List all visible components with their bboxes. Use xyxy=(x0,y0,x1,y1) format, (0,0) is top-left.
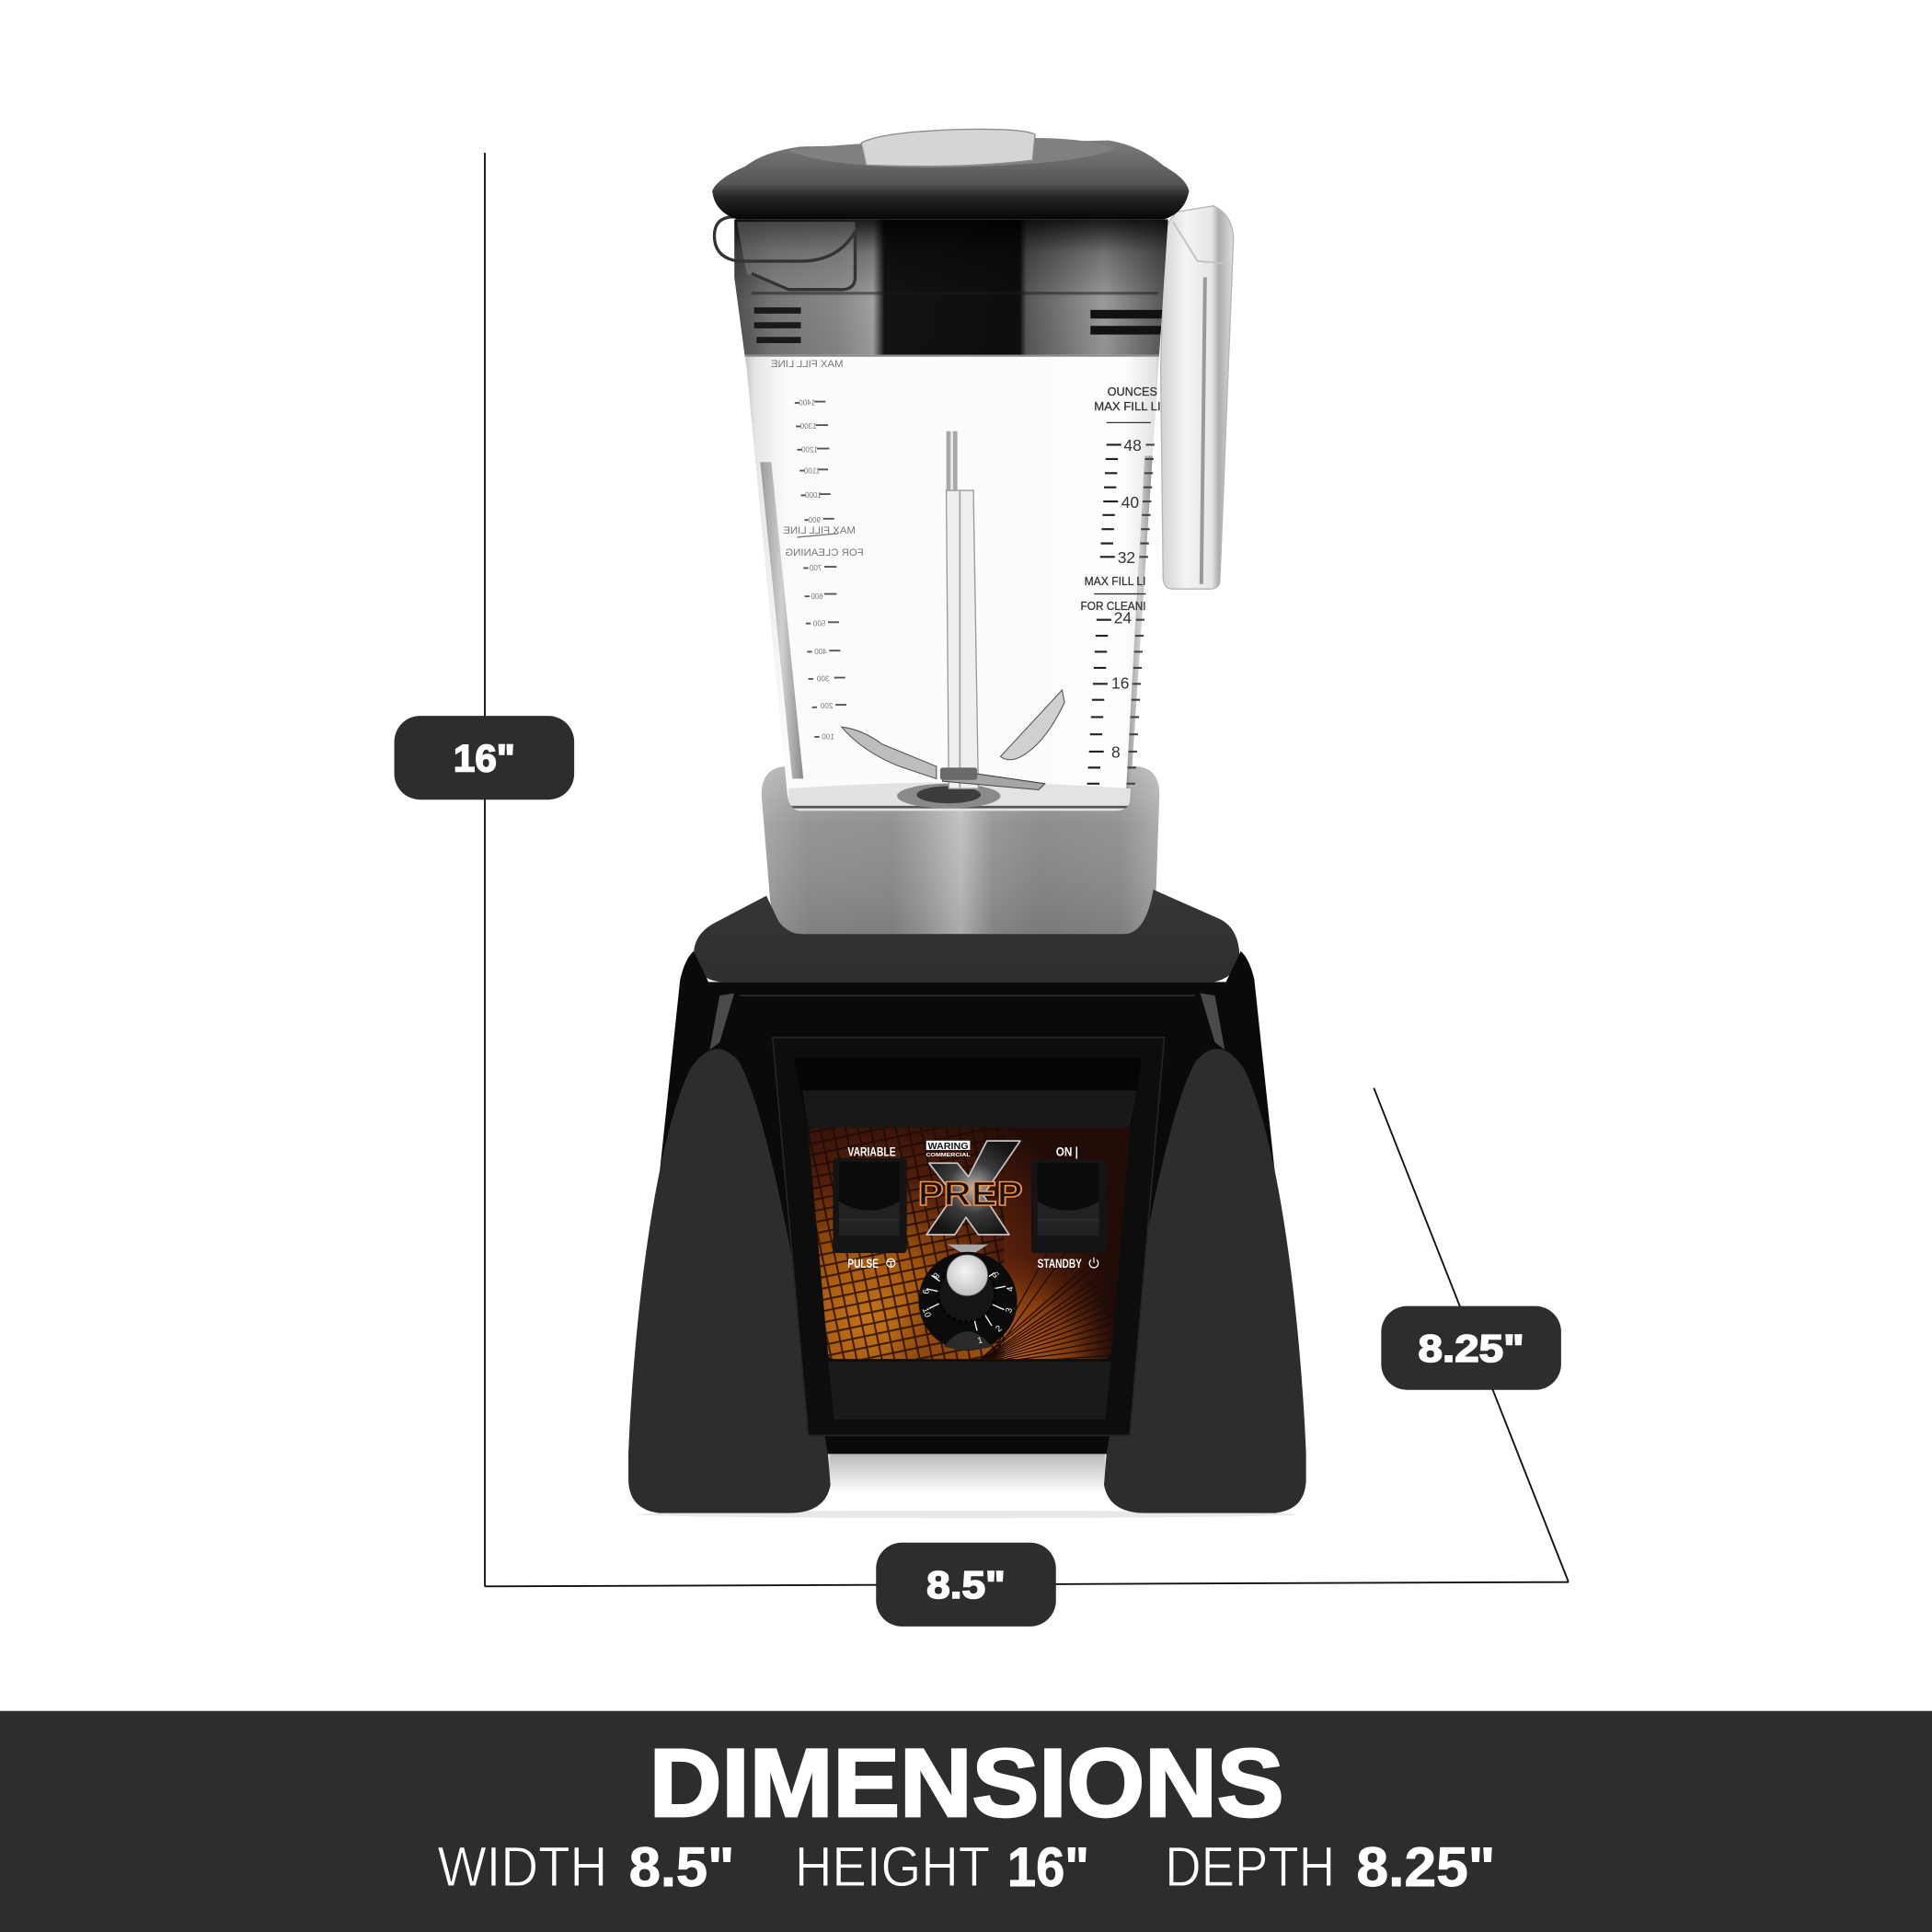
speed dial: 4 xyxy=(1006,1286,1015,1292)
jar corner ribs xyxy=(760,456,1155,788)
width dimension line xyxy=(485,1582,1569,1586)
blender illustration xyxy=(628,129,1306,1518)
right measurement scale: 16 xyxy=(1111,674,1129,693)
right measurement scale: 32 xyxy=(1118,548,1135,567)
standby icon xyxy=(1089,1258,1098,1268)
left measurement scale (seen through jar, mirrored): 600 xyxy=(811,592,823,601)
height spec: 16" xyxy=(1007,1835,1089,1898)
right rocker switch xyxy=(1031,1159,1107,1253)
floor shadow xyxy=(637,1452,1297,1518)
lid clear cap xyxy=(861,129,1035,167)
speed dial: 2 xyxy=(994,1324,1004,1334)
chevron pointer xyxy=(948,1245,988,1257)
right rubber foot panel xyxy=(1104,1049,1306,1513)
control panel housing xyxy=(773,1038,1165,1435)
bottom banner xyxy=(0,1711,1932,1932)
right measurement scale: 8 xyxy=(1111,743,1121,762)
left measurement scale (seen through jar, mirrored): FOR CLEANING xyxy=(785,547,864,558)
right measurement scale: MAX FILL LI xyxy=(1094,399,1161,413)
left measurement scale (seen through jar, mirrored) xyxy=(771,359,864,742)
waring commercial logo xyxy=(926,1141,971,1158)
left measurement scale (seen through jar, mirrored): 1400 xyxy=(799,399,815,408)
switch labels xyxy=(847,1144,1082,1271)
left measurement scale (seen through jar, mirrored): 900 xyxy=(808,516,821,524)
depth label: 8.25": 8.25" xyxy=(1419,1327,1524,1370)
left measurement scale (seen through jar, mirrored): 300 xyxy=(816,675,829,684)
speed dial: 1 xyxy=(976,1335,983,1345)
left measurement scale (seen through jar, mirrored): 100 xyxy=(822,733,834,742)
switch labels: VARIABLE xyxy=(847,1144,896,1158)
banner title: DIMENSIONS xyxy=(650,1730,1284,1837)
left rocker switch xyxy=(833,1158,907,1253)
width label: 8.5": 8.5" xyxy=(926,1563,1006,1606)
switch labels: ON | xyxy=(1056,1144,1078,1158)
left measurement scale (seen through jar, mirrored): MAX FILL LINE xyxy=(771,359,844,370)
left measurement scale (seen through jar, mirrored): 200 xyxy=(820,702,833,710)
right measurement scale xyxy=(1081,385,1161,784)
speed dial: 3 xyxy=(1004,1306,1014,1314)
left measurement scale (seen through jar, mirrored): 1100 xyxy=(803,466,820,475)
depth dimension line xyxy=(1374,1088,1569,1582)
speed dial xyxy=(918,1252,1018,1351)
depth spec xyxy=(1165,1835,1495,1898)
right measurement scale: 40 xyxy=(1121,493,1139,512)
switch labels: PULSE xyxy=(847,1257,879,1271)
left measurement scale (seen through jar, mirrored): MAX FILL LINE xyxy=(783,525,856,536)
speed dial: 10 xyxy=(921,1306,933,1318)
depth spec: 8.25" xyxy=(1357,1835,1495,1898)
depth spec: DEPTH xyxy=(1165,1835,1335,1898)
speed dial: 5 xyxy=(991,1270,1001,1280)
pour spout loop xyxy=(715,217,855,290)
height spec: HEIGHT xyxy=(795,1835,990,1898)
left measurement scale (seen through jar, mirrored): 700 xyxy=(809,564,822,572)
right measurement scale: OUNCES xyxy=(1108,385,1157,398)
jar lid xyxy=(712,129,1189,219)
height label: 16" xyxy=(395,716,574,799)
waring commercial logo: COMMERCIAL xyxy=(926,1153,971,1158)
left measurement scale (seen through jar, mirrored): 400 xyxy=(814,648,827,656)
jar dark upper band xyxy=(727,219,1170,811)
right measurement scale: 24 xyxy=(1114,609,1132,627)
left rubber foot panel xyxy=(628,1049,831,1513)
width spec: 8.5" xyxy=(629,1835,734,1898)
left measurement scale (seen through jar, mirrored): 1000 xyxy=(804,491,822,500)
height dimension line xyxy=(484,153,486,1586)
pulse icon xyxy=(887,1259,895,1267)
width spec xyxy=(437,1835,734,1898)
depth label: 8.25" xyxy=(1381,1306,1561,1390)
control panel label xyxy=(808,1128,1130,1360)
width label: 8.5" xyxy=(876,1543,1056,1627)
right measurement scale: 48 xyxy=(1123,436,1142,454)
right measurement scale: MAX FILL LI xyxy=(1085,574,1146,588)
width spec: WIDTH xyxy=(437,1835,607,1898)
speed dial: 8 xyxy=(931,1271,941,1281)
height label: 16": 16" xyxy=(454,736,515,779)
speed dial: 9 xyxy=(921,1289,930,1294)
jar body xyxy=(715,217,1170,811)
x-prep logo xyxy=(918,1141,1023,1235)
waring commercial logo: WARING xyxy=(927,1142,969,1152)
base top cap xyxy=(694,890,1239,982)
right measurement scale: FOR CLEANI xyxy=(1081,599,1146,613)
motor base body xyxy=(628,951,1306,1466)
left measurement scale (seen through jar, mirrored): 1300 xyxy=(799,422,816,431)
jar collar xyxy=(762,766,1159,934)
jar handle xyxy=(1161,206,1234,589)
switch labels: STANDBY xyxy=(1038,1257,1082,1271)
blade assembly xyxy=(842,431,1064,809)
x-prep logo: PREP xyxy=(918,1175,1023,1213)
left measurement scale (seen through jar, mirrored): 500 xyxy=(812,619,825,627)
left measurement scale (seen through jar, mirrored): 1200 xyxy=(800,446,818,454)
dial knob cap xyxy=(947,1255,987,1295)
